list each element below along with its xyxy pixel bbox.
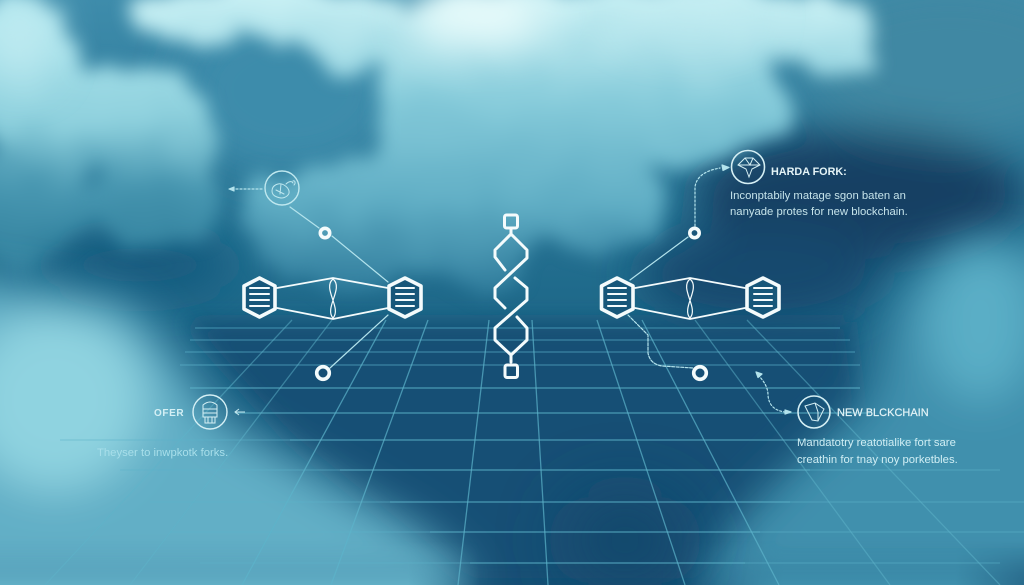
right top node (690, 228, 699, 238)
right bottom node (694, 367, 706, 379)
right link with twist (635, 278, 745, 319)
fog at the bottom edge (0, 552, 1024, 585)
arrow: offer (235, 409, 245, 415)
callout: hard fork (730, 150, 908, 218)
callout: new blockchain (797, 396, 958, 466)
dark grid floor (185, 322, 860, 585)
left connector lines (229, 187, 388, 368)
heading: hard fork: HARDA FORK: (771, 166, 847, 178)
right connector lines (628, 165, 791, 414)
right hexagon node A (602, 278, 633, 317)
right fork diagram (602, 165, 791, 414)
left top node (320, 228, 330, 238)
callout: offer (97, 395, 245, 459)
left link with twist (277, 278, 388, 319)
description: offer: Theyser to inwpkotk forks. (97, 447, 228, 459)
left cloud mass (0, 0, 220, 260)
description: hard fork: nanyade protes for new blockchain. (730, 206, 908, 218)
perspective grid floor (45, 320, 1024, 585)
left hexagon node A (244, 278, 275, 317)
icon: hard fork gem (732, 150, 764, 184)
icon: new blockchain gem (798, 396, 830, 428)
description: hard fork: Inconptabily matage sgon baten an (730, 190, 906, 202)
center twisted chain (495, 215, 527, 378)
icon: brain circle (265, 171, 299, 205)
left hexagon node B (389, 278, 421, 317)
right hexagon node B (747, 278, 779, 317)
description: new blockchain: Mandatotry reatotialike fort sare (797, 437, 956, 449)
icon: server stack (193, 395, 227, 429)
central cloud mass (125, 0, 873, 290)
description: new blockchain: creathin for tnay noy porketbles. (797, 454, 958, 466)
heading: offer: OFER (154, 408, 184, 419)
left bottom node (317, 367, 329, 379)
heading: new blockchain: NEW BLCKCHAIN (837, 407, 929, 419)
left fork diagram (229, 171, 421, 379)
